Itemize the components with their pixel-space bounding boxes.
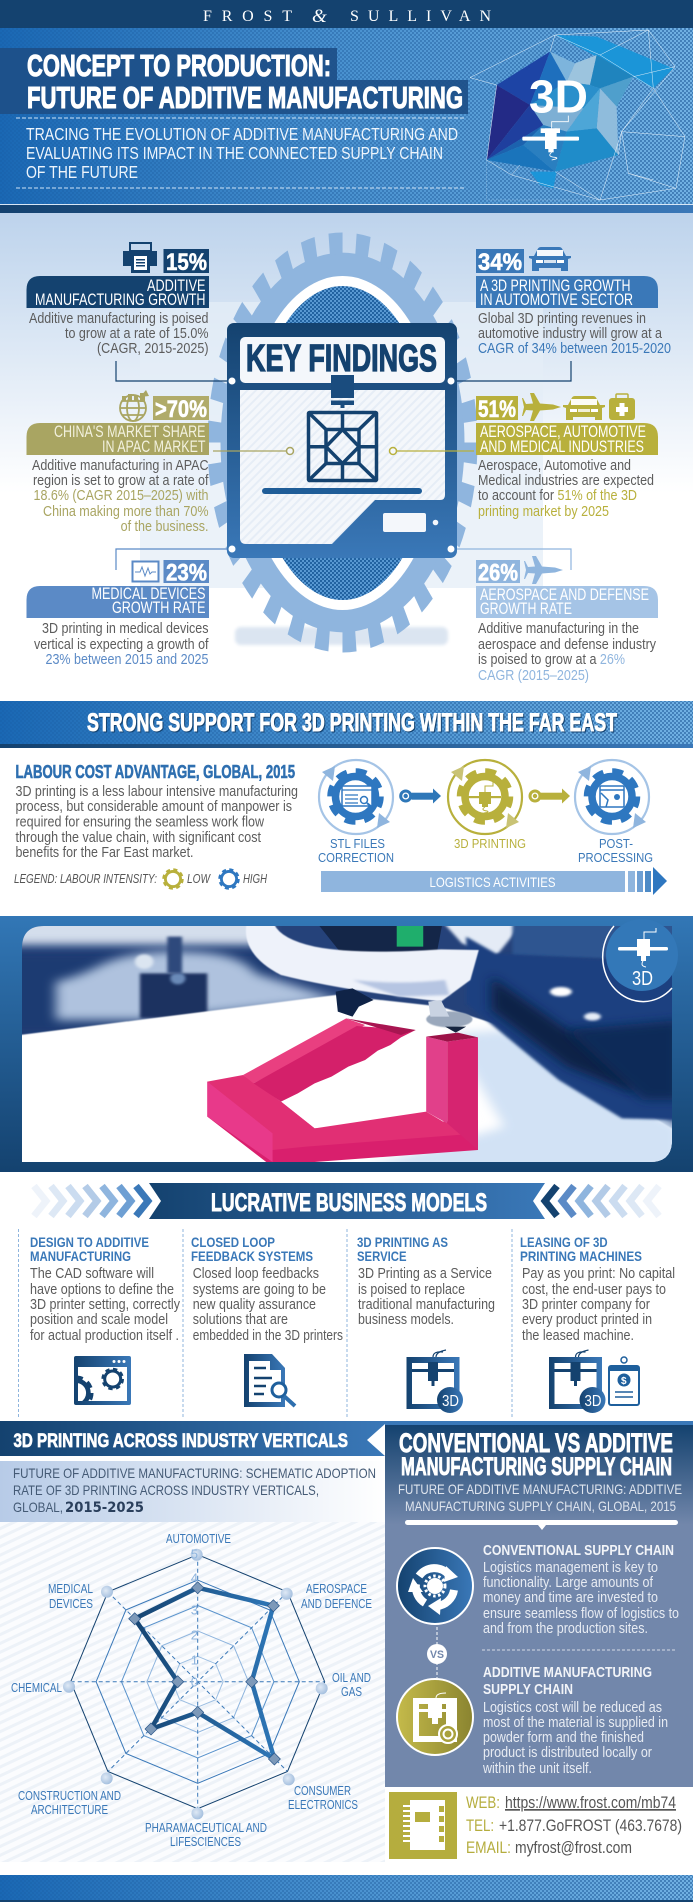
legend: labour intensity: LEGEND: LABOUR INTENSITY: xyxy=(14,872,157,886)
column: closed loop feedback systems xyxy=(191,1234,343,1407)
finding: china market share: CHINA'S MARKET SHARE xyxy=(54,423,206,441)
icon: monitor xyxy=(132,562,158,582)
finding: aerospace and defense xyxy=(476,556,658,684)
chart subtitle: 2015-2025 xyxy=(65,1500,144,1516)
finding: additive manufacturing growth: MANUFACTURING GROWTH xyxy=(35,291,206,309)
data markers xyxy=(129,1582,280,1765)
radar labels: OIL AND xyxy=(332,1670,371,1685)
radar labels: AND DEFENCE xyxy=(301,1596,372,1611)
contact details xyxy=(389,1792,682,1859)
column: 3D printing as service: is poised to replace xyxy=(358,1282,465,1298)
chart subtitle: RATE OF 3D PRINTING ACROSS INDUSTRY VERTICALS, xyxy=(13,1482,319,1498)
icon: 3D printer with clipboard: 3D xyxy=(584,1393,602,1410)
icon: 3D printer with clipboard xyxy=(549,1350,639,1413)
subtitle: EVALUATING ITS IMPACT IN THE CONNECTED SUPPLY CHAIN xyxy=(26,143,443,163)
text: conventional supply chain: Logistics management is key to xyxy=(483,1560,658,1576)
process: STL files correction xyxy=(318,760,394,865)
radar labels: CONSTRUCTION AND xyxy=(18,1788,121,1803)
icon: low-poly 3D graphic xyxy=(470,30,685,200)
column: 3D printing as service: business models. xyxy=(358,1312,454,1328)
column: design to additive manufacturing: MANUFACTURING xyxy=(30,1248,131,1264)
top brand band: FROST xyxy=(203,8,292,25)
finding: medical devices: 23% xyxy=(166,560,207,586)
text: additive supply chain: product is distributed locally or xyxy=(483,1745,652,1761)
arrow xyxy=(401,788,441,804)
subtitle: TRACING THE EVOLUTION OF ADDITIVE MANUFACTURING AND xyxy=(26,124,458,144)
finding: automotive sector: 34% xyxy=(478,249,522,276)
hero panel xyxy=(0,28,693,213)
process: post-processing: POST- xyxy=(599,836,633,851)
printer illustration xyxy=(213,323,474,558)
gold connectors xyxy=(213,448,474,454)
icon: car xyxy=(529,247,571,271)
column: leasing of 3D printing machines xyxy=(520,1234,675,1413)
axis end markers xyxy=(63,1549,328,1819)
icon: low-poly 3D graphic: 3D xyxy=(529,70,588,122)
radar labels: LIFESCIENCES xyxy=(170,1834,241,1849)
chevrons xyxy=(34,1186,659,1216)
photo: 3D printing in progress xyxy=(22,926,672,1162)
pink printed part xyxy=(207,1018,478,1162)
column: 3D printing as service: traditional manufacturing xyxy=(358,1297,495,1313)
panel: labour cost text: process, but considerable amount of manpower is xyxy=(16,799,292,815)
heading xyxy=(398,1428,682,1530)
finding: china market share: of the business. xyxy=(121,519,208,535)
finding: china market share: China making more than 70% xyxy=(43,504,209,520)
icon: print head xyxy=(522,128,579,152)
finding: aerospace automotive medical: printing market by 2025 xyxy=(478,504,609,520)
chart subtitle: FUTURE OF ADDITIVE MANUFACTURING: SCHEMATIC ADOPTION xyxy=(13,1465,376,1481)
contact details: WEB: xyxy=(466,1793,500,1812)
radar labels: ARCHITECTURE xyxy=(31,1802,108,1817)
finding: china market share: IN APAC MARKET xyxy=(102,438,206,456)
title xyxy=(0,48,468,115)
finding: china market share: 18.6% (CAGR 2015–2025) with xyxy=(34,488,208,504)
icon: 3D badge xyxy=(603,919,678,1002)
finding: automotive sector: Global 3D printing revenues in xyxy=(478,311,646,327)
axis values: 4 xyxy=(191,1571,198,1586)
top brand band: & xyxy=(312,6,327,27)
legend: labour intensity: HIGH xyxy=(243,872,268,886)
icon: document window xyxy=(342,786,373,808)
text: additive supply chain: ADDITIVE MANUFACTURING xyxy=(483,1665,652,1681)
panel: labour cost text: 3D printing is a less labour intensive manufacturing xyxy=(16,784,298,800)
column: closed loop feedback systems: solutions that are xyxy=(193,1312,288,1328)
finding: medical devices: 3D printing in medical devices xyxy=(42,621,208,637)
finding: aerospace and defense: is poised to grow at a 26% xyxy=(478,652,625,668)
finding: automotive sector: automotive industry will grow at a xyxy=(478,326,663,342)
finding: aerospace and defense: Additive manufacturing in the xyxy=(478,621,639,637)
connector lines xyxy=(116,361,571,570)
finding: medical devices: vertical is expecting a growth of xyxy=(34,637,209,653)
top brand band xyxy=(0,0,693,28)
chart subtitle xyxy=(0,1461,385,1522)
column: closed loop feedback systems: embedded in the 3D printers xyxy=(193,1328,343,1344)
vs connector xyxy=(427,1627,447,1678)
radar labels: GAS xyxy=(341,1684,362,1699)
finding: medical devices: MEDICAL DEVICES xyxy=(92,585,206,603)
finding: additive manufacturing growth: Additive manufacturing is poised xyxy=(29,311,208,327)
banner: strong support xyxy=(0,701,693,748)
icon: settings window xyxy=(600,786,624,807)
legend: labour intensity: LOW xyxy=(187,872,211,886)
panel: labour cost text: required for ensuring the seamless work flow xyxy=(16,815,264,831)
icon: plane xyxy=(524,556,563,584)
finding: aerospace and defense: aerospace and defense industry xyxy=(478,637,657,653)
title: CONCEPT TO PRODUCTION: xyxy=(27,48,331,83)
axis values: 3 xyxy=(191,1603,198,1618)
icon: print head xyxy=(467,792,501,807)
text: conventional supply chain: money and time are invested to xyxy=(483,1590,658,1606)
footer band xyxy=(0,1875,693,1902)
icon: notebook xyxy=(389,1792,457,1859)
data line xyxy=(135,1588,274,1759)
icon: 3D printer with clipboard: $ xyxy=(621,1376,627,1387)
contact details: TEL: xyxy=(466,1816,494,1835)
finding: additive manufacturing growth: to grow at a rate of 15.0% xyxy=(65,326,209,342)
axis values: 5 xyxy=(191,1547,198,1562)
text: additive supply chain: Logistics cost will be reduced as xyxy=(483,1700,662,1716)
column: leasing of 3D printing machines: every product printed in xyxy=(522,1312,652,1328)
panel: labour cost text: through the value chain, with significant cost xyxy=(16,830,261,846)
finding: china market share xyxy=(26,390,209,535)
finding: additive manufacturing growth: (CAGR, 2015-2025) xyxy=(97,341,208,357)
finding: aerospace automotive medical: to account for 51% of the 3D xyxy=(478,488,637,504)
column: design to additive manufacturing: DESIGN TO ADDITIVE xyxy=(30,1234,149,1250)
column: leasing of 3D printing machines: the leased machine. xyxy=(522,1328,634,1344)
finding: aerospace and defense: 26% xyxy=(478,560,518,586)
banner: lucrative business models xyxy=(34,1183,659,1219)
top brand band: SULLIVAN xyxy=(350,8,491,25)
panel: key findings xyxy=(0,213,693,684)
column: design to additive manufacturing: 3D printer setting, correctly xyxy=(30,1297,181,1313)
finding: aerospace automotive medical: AND MEDICAL INDUSTRIES xyxy=(480,438,644,456)
column: leasing of 3D printing machines: 3D printer company for xyxy=(522,1297,650,1313)
heading: key findings: KEY FINDINGS xyxy=(246,338,437,380)
radar labels: AEROSPACE xyxy=(306,1581,367,1596)
text: additive supply chain xyxy=(482,1665,668,1777)
radar labels: DEVICES xyxy=(49,1596,93,1611)
icon: window with gears xyxy=(74,1356,131,1405)
column: closed loop feedback systems: CLOSED LOOP xyxy=(191,1234,275,1250)
process: STL files correction: STL FILES xyxy=(330,836,385,851)
finding: automotive sector: A 3D PRINTING GROWTH xyxy=(480,277,630,295)
icon: globe with bars xyxy=(120,395,146,421)
column: closed loop feedback systems: new quality assurance xyxy=(193,1297,316,1313)
contact details: myfrost@frost.com xyxy=(515,1838,632,1857)
text: conventional supply chain xyxy=(483,1543,679,1637)
panel: labour cost text: LABOUR COST ADVANTAGE, GLOBAL, 2015 xyxy=(16,762,295,782)
column: design to additive manufacturing: have options to define the xyxy=(30,1282,174,1298)
panel: labour cost text: benefits for the Far East market. xyxy=(16,845,194,861)
finding: aerospace automotive medical xyxy=(476,393,658,520)
finding: aerospace automotive medical: 51% xyxy=(478,396,516,423)
finding: china market share: region is set to grow at a rate of xyxy=(33,473,209,489)
icon: car xyxy=(563,396,605,420)
finding: automotive sector: IN AUTOMOTIVE SECTOR xyxy=(480,291,633,309)
heading banner xyxy=(0,1421,385,1456)
icon: document with magnifier xyxy=(244,1354,295,1407)
finding: aerospace automotive medical: Medical industries are expected xyxy=(478,473,654,489)
radar labels xyxy=(11,1531,372,1849)
subtitle: OF THE FUTURE xyxy=(26,162,138,182)
column: closed loop feedback systems: FEEDBACK SYSTEMS xyxy=(191,1248,313,1264)
radar labels: AUTOMOTIVE xyxy=(166,1531,231,1546)
panel: photo band xyxy=(0,913,693,1172)
column: design to additive manufacturing: The CAD software will xyxy=(30,1266,154,1282)
process: STL files correction: CORRECTION xyxy=(318,850,394,865)
process: 3D printing: 3D PRINTING xyxy=(454,836,526,851)
arrow xyxy=(530,788,570,804)
gear xyxy=(214,243,470,642)
text: conventional supply chain: functionality. Large amounts of xyxy=(483,1575,654,1591)
finding: additive manufacturing growth: ADDITIVE xyxy=(147,277,206,295)
arrow: logistics activities: LOGISTICS ACTIVITIES xyxy=(430,874,556,890)
finding: automotive sector xyxy=(476,247,671,357)
radar labels: ELECTRONICS xyxy=(288,1797,358,1812)
finding: china market share: Additive manufacturing in APAC xyxy=(32,458,208,474)
icon: 3D printer: 3D xyxy=(442,1393,459,1410)
icon: 3D printer xyxy=(406,1350,463,1413)
radar labels: CHEMICAL xyxy=(11,1680,62,1695)
radar chart xyxy=(63,1547,328,1819)
finding: additive manufacturing growth: 15% xyxy=(166,249,207,276)
finding: aerospace and defense: CAGR (2015–2025) xyxy=(478,668,589,684)
axis values: 1 xyxy=(191,1653,198,1668)
contact details: EMAIL: xyxy=(466,1838,511,1857)
finding: aerospace automotive medical: Aerospace, Automotive and xyxy=(478,458,631,474)
column: 3D printing as service: 3D PRINTING AS xyxy=(357,1234,448,1250)
subtitle xyxy=(26,124,458,182)
printed object xyxy=(308,412,377,481)
column: closed loop feedback systems: Closed loop feedbacks xyxy=(193,1266,319,1282)
radar labels: PHARAMACEUTICAL AND xyxy=(145,1820,267,1835)
text: additive supply chain: within the unit itself. xyxy=(482,1761,592,1777)
finding: medical devices: 23% between 2015 and 2025 xyxy=(46,652,208,668)
finding: medical devices xyxy=(26,560,209,668)
finding: additive manufacturing growth xyxy=(26,243,209,357)
chart subtitle: GLOBAL, xyxy=(13,1499,63,1515)
column: design to additive manufacturing xyxy=(30,1234,181,1409)
panel: 3D printing across industry verticals xyxy=(0,1421,385,1862)
axis values: 2 xyxy=(191,1628,198,1643)
icon: plane xyxy=(522,393,561,421)
wireframe lines xyxy=(470,30,685,200)
vs connector: VS xyxy=(430,1649,444,1661)
heading banner: 3D PRINTING ACROSS INDUSTRY VERTICALS xyxy=(14,1431,348,1452)
column: design to additive manufacturing: for actual production itself . xyxy=(30,1328,179,1344)
icon: printer xyxy=(123,243,157,273)
panel: labour cost text xyxy=(16,762,298,861)
column: closed loop feedback systems: systems are going to be xyxy=(193,1282,326,1298)
title: FUTURE OF ADDITIVE MANUFACTURING xyxy=(27,80,463,115)
axis values xyxy=(191,1547,198,1690)
icon: additive supply chain xyxy=(397,1679,473,1755)
process: post-processing xyxy=(575,760,653,865)
axis values: 0 xyxy=(191,1675,198,1690)
banner: lucrative business models: LUCRATIVE BUSINESS MODELS xyxy=(211,1189,487,1217)
column: leasing of 3D printing machines: cost, the end-user pays to xyxy=(522,1282,666,1298)
finding: medical devices: GROWTH RATE xyxy=(112,599,206,617)
panel: conventional vs additive supply chain xyxy=(385,1421,693,1787)
icon: medical kit xyxy=(609,394,635,420)
text: additive supply chain: powder form and the finished xyxy=(483,1730,644,1746)
column: leasing of 3D printing machines: LEASING OF 3D xyxy=(520,1234,608,1250)
finding: aerospace and defense: GROWTH RATE xyxy=(480,600,572,618)
column: design to additive manufacturing: position and scale model xyxy=(30,1312,168,1328)
arrow: logistics activities xyxy=(321,867,667,895)
legend: labour intensity xyxy=(14,869,268,889)
process: post-processing: PROCESSING xyxy=(578,850,653,865)
text: conventional supply chain: and from the production sites. xyxy=(483,1621,648,1637)
icon: 3D badge: 3D xyxy=(632,968,653,990)
radar labels: CONSUMER xyxy=(294,1783,351,1798)
text: additive supply chain: SUPPLY CHAIN xyxy=(483,1682,573,1698)
finding: aerospace automotive medical: AEROSPACE, AUTOMOTIVE xyxy=(480,423,646,441)
column: leasing of 3D printing machines: PRINTING MACHINES xyxy=(520,1248,642,1264)
radar labels: MEDICAL xyxy=(48,1581,93,1596)
process: 3D printing xyxy=(448,760,526,851)
text: additive supply chain: most of the material is supplied in xyxy=(483,1715,668,1731)
column: 3D printing as service: 3D Printing as a Service xyxy=(358,1266,492,1282)
column: 3D printing as service: SERVICE xyxy=(357,1248,406,1264)
icon: conventional supply chain xyxy=(397,1548,473,1624)
column: 3D printing as service xyxy=(357,1234,495,1413)
finding: china market share: >70% xyxy=(155,396,207,423)
